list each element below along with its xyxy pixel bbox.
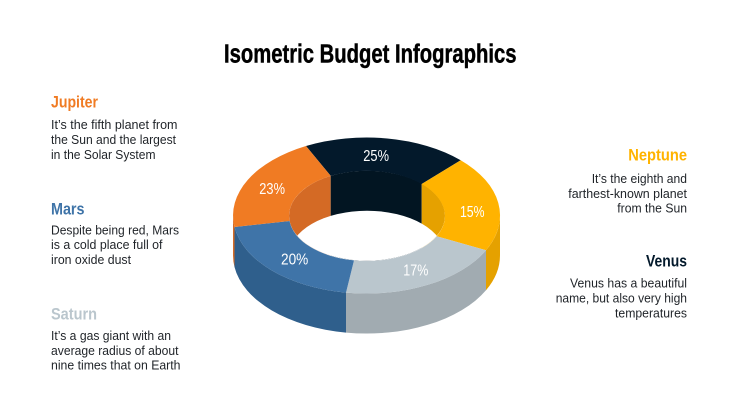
text block: Saturn xyxy=(51,305,180,372)
heading: Jupiter: Jupiter xyxy=(51,94,98,112)
description: Saturn: nine times that on Earth xyxy=(51,358,180,372)
description: Mars: Despite being red, Mars xyxy=(51,223,179,237)
percentage labels: 20% xyxy=(281,251,308,268)
description: Saturn xyxy=(51,329,180,372)
description: Mars: is a cold place full of xyxy=(51,238,163,252)
heading: Saturn: Saturn xyxy=(51,305,97,323)
description: Venus: name, but also very high xyxy=(556,291,687,305)
description: Neptune: farthest-known planet xyxy=(568,187,687,201)
description: Mars: iron oxide dust xyxy=(51,253,131,267)
description: Venus: temperatures xyxy=(615,306,687,320)
text block: Jupiter xyxy=(51,94,178,162)
percentage labels: 23% xyxy=(259,181,285,198)
description: Jupiter: in the Solar System xyxy=(51,148,156,162)
description: Saturn: average radius of about xyxy=(51,344,179,358)
text block: Neptune xyxy=(568,147,687,216)
percentage labels: 25% xyxy=(363,148,389,165)
segment: 15% yellow xyxy=(422,160,500,250)
percentage labels: 17% xyxy=(403,263,428,280)
heading: Mars: Mars xyxy=(51,200,84,218)
description: Neptune xyxy=(568,172,687,216)
isometric donut chart xyxy=(233,138,500,334)
percentage labels: 15% xyxy=(460,204,484,221)
description: Neptune: from the Sun xyxy=(617,202,687,216)
outer side walls xyxy=(233,216,500,334)
description: Neptune: It’s the eighth and xyxy=(592,172,687,186)
text block: Mars xyxy=(51,200,179,267)
segment: 20% blue xyxy=(234,221,354,293)
text block: Venus xyxy=(556,252,687,320)
percentage labels xyxy=(259,148,484,280)
segment: 25% navy xyxy=(306,138,461,184)
description: Venus: Venus has a beautiful xyxy=(570,277,687,291)
description: Saturn: It’s a gas giant with an xyxy=(51,329,171,343)
segment: 17% gray xyxy=(346,236,486,294)
description: Jupiter: the Sun and the largest xyxy=(51,133,176,147)
heading: Neptune: Neptune xyxy=(628,147,687,165)
description: Jupiter xyxy=(51,118,178,162)
heading: Venus: Venus xyxy=(646,252,687,270)
title: Isometric Budget Infographics xyxy=(224,41,516,69)
inner walls of the hole xyxy=(289,170,445,261)
description: Jupiter: It’s the fifth planet from xyxy=(51,118,178,132)
description: Venus xyxy=(556,277,687,320)
description: Mars xyxy=(51,223,179,267)
segment: 23% orange xyxy=(233,146,331,227)
